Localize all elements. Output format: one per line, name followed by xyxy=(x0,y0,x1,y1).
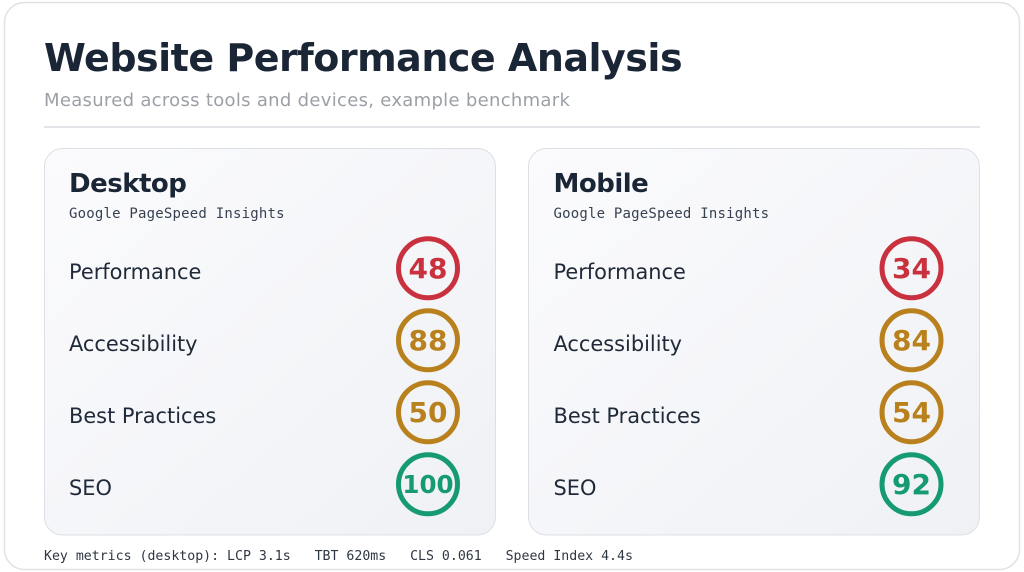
mobile performance row xyxy=(554,239,941,298)
desktop performance row: 48 xyxy=(409,252,447,285)
mobile seo row: 92 xyxy=(892,468,931,501)
desktop seo row: SEO xyxy=(69,476,112,500)
mobile accessibility row xyxy=(554,311,941,370)
desktop seo row: 100 xyxy=(402,470,454,499)
mobile best practices row: Best Practices xyxy=(554,404,701,428)
title: Website Performance Analysis xyxy=(44,36,682,80)
footer key metrics: Key metrics (desktop): LCP 3.1s TBT 620ms CLS 0.061 Speed Index 4.4s xyxy=(44,549,633,564)
mobile best practices row xyxy=(554,383,941,442)
mobile performance row: 34 xyxy=(892,252,931,285)
desktop heading: Desktop xyxy=(69,169,186,199)
mobile accessibility row: 84 xyxy=(892,324,931,357)
desktop accessibility row xyxy=(69,311,458,370)
mobile accessibility row: Accessibility xyxy=(554,332,682,356)
mobile seo row xyxy=(554,455,941,514)
desktop source: Google PageSpeed Insights xyxy=(69,206,285,222)
desktop best practices row xyxy=(69,383,458,442)
desktop performance row: Performance xyxy=(69,260,201,284)
mobile seo row: SEO xyxy=(554,476,596,500)
desktop performance row xyxy=(69,239,458,298)
mobile card background xyxy=(528,148,980,535)
mobile best practices row: 54 xyxy=(892,396,931,429)
mobile source: Google PageSpeed Insights xyxy=(554,206,769,222)
desktop accessibility row: 88 xyxy=(409,324,447,357)
desktop seo row xyxy=(69,455,458,514)
subtitle: Measured across tools and devices, example benchmark xyxy=(44,90,570,111)
desktop card background xyxy=(44,148,496,535)
desktop best practices row: 50 xyxy=(409,396,447,429)
panel: desktop xyxy=(44,148,496,535)
mobile heading: Mobile xyxy=(554,169,648,199)
desktop best practices row: Best Practices xyxy=(69,404,216,428)
desktop accessibility row: Accessibility xyxy=(69,332,198,356)
panel: mobile xyxy=(528,148,980,535)
mobile performance row: Performance xyxy=(554,260,686,284)
